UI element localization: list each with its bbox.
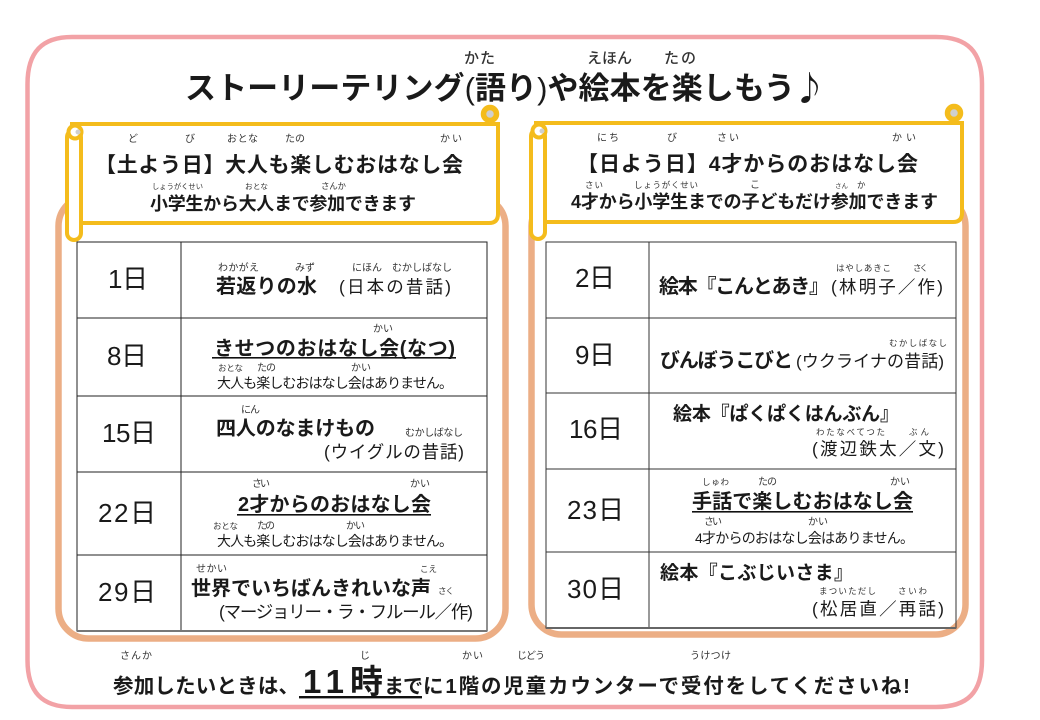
row: 2日 — [575, 263, 943, 298]
sunday banner furigana: しょうがくせい — [634, 180, 698, 190]
book title: 絵本『こぶじいさま』 — [660, 562, 853, 584]
event note: 大人も楽しむおはなし会はありません。 — [217, 375, 453, 391]
saturday table — [77, 242, 487, 631]
book author: (林明子／作) — [831, 277, 943, 297]
event furigana: たの — [758, 476, 777, 488]
panel: sunday — [531, 106, 966, 634]
title text: ストーリーテリング(語り)や絵本を楽しもう — [185, 71, 795, 106]
date: 1日 — [108, 264, 148, 294]
story title: びんぼうこびと — [660, 349, 793, 372]
event furigana: かい — [808, 516, 828, 528]
sunday banner heading: 【日よう日】4才からのおはなし会 — [577, 153, 918, 176]
author furigana — [819, 586, 927, 596]
sunday banner subheading: 4才から小学生までの子どもだけ参加できます — [571, 191, 938, 212]
story furigana — [218, 261, 452, 274]
event note: 大人も楽しむおはなし会はありません。 — [217, 533, 453, 549]
book title: 絵本『こんとあき』 — [659, 275, 829, 298]
book author: (松居直／再話) — [812, 599, 944, 619]
saturday banner heading: 【土よう日】大人も楽しむおはなし会 — [95, 154, 463, 177]
saturday banner furigana: おとな — [227, 133, 258, 145]
author furigana: まついただし — [819, 586, 876, 596]
footer furigana: じ — [360, 650, 370, 662]
sunday banner furigana: こ — [750, 180, 760, 191]
event underline — [212, 357, 456, 359]
footer furigana: じどう — [517, 650, 545, 662]
author furigana: わたなべてつた — [816, 427, 885, 437]
date: 22日 — [98, 498, 156, 528]
saturday banner furigana: さんか — [321, 181, 346, 191]
sunday banner furigana: さい — [585, 180, 603, 190]
footer furigana — [120, 650, 731, 662]
event note: 4才からのおはなし会はありません。 — [695, 530, 914, 546]
sunday scroll banner — [531, 106, 962, 239]
date: 2日 — [575, 263, 615, 293]
saturday banner furigana: たの — [285, 133, 305, 145]
footer furigana: さんか — [120, 650, 152, 662]
date: 9日 — [575, 340, 615, 370]
saturday banner furigana: しょうがくせい — [152, 182, 203, 191]
saturday banner furigana: おとな — [245, 182, 268, 191]
story furigana: こえ — [420, 564, 437, 574]
panel: saturday — [58, 108, 506, 638]
author furigana — [836, 263, 928, 273]
row: 16日 — [569, 403, 944, 459]
event underline — [692, 511, 913, 513]
origin furigana: むかしばなし — [889, 338, 947, 348]
sunday banner text — [571, 132, 938, 212]
story furigana: にほん — [352, 262, 382, 274]
sunday orange frame — [532, 196, 966, 634]
event title: 2才からのおはなし会 — [238, 493, 431, 516]
row: 29日 — [98, 563, 473, 622]
event furigana — [218, 323, 393, 374]
event title: きせつのおはなし会(なつ) — [214, 337, 455, 360]
footer furigana: かい — [462, 650, 483, 662]
story title: 四人のなまけもの — [216, 417, 375, 440]
row: 30日 — [567, 562, 944, 619]
story author: (マージョリー・ラ・フルール／作) — [219, 602, 473, 622]
sunday banner furigana: にち — [597, 132, 619, 144]
title furigana: かた — [464, 50, 495, 67]
event furigana: おとな — [213, 521, 238, 531]
footer text end: に1階の児童カウンターで受付をしてくださいね! — [423, 675, 910, 698]
title — [185, 50, 826, 110]
row: 23日 — [567, 476, 914, 546]
row: 22日 — [98, 478, 453, 549]
story furigana — [241, 404, 463, 439]
footer notice — [113, 650, 910, 700]
row: 1日 — [108, 261, 452, 298]
event furigana: かい — [410, 478, 430, 490]
sunday banner furigana: び — [667, 132, 677, 144]
story title: 世界でいちばんきれいな声 — [191, 577, 431, 600]
story title: 若返りの水 — [216, 275, 317, 298]
event furigana — [213, 478, 430, 532]
event title: 手話で楽しむおはなし会 — [692, 490, 913, 513]
event furigana: たの — [257, 520, 275, 532]
footer text middle: まで — [384, 676, 423, 698]
author furigana: さく — [913, 263, 928, 273]
author furigana: さいわ — [898, 586, 927, 596]
saturday banner furigana — [128, 133, 462, 191]
event furigana: かい — [346, 520, 365, 532]
author furigana — [816, 427, 929, 437]
date: 29日 — [98, 577, 156, 607]
sunday banner furigana: さい — [717, 132, 739, 144]
footer text start: 参加したいときは、 — [113, 675, 299, 698]
sunday banner furigana: か — [857, 180, 866, 190]
event underline — [237, 514, 431, 516]
book author: (渡辺鉄太／文) — [812, 439, 944, 459]
saturday banner furigana: び — [185, 133, 195, 145]
date: 16日 — [569, 414, 623, 444]
event furigana: たの — [257, 362, 276, 374]
event furigana: さい — [252, 478, 270, 490]
story furigana: わかがえ — [218, 261, 259, 274]
sunday table grid — [546, 242, 956, 628]
title furigana — [464, 50, 696, 67]
saturday scroll banner — [67, 108, 498, 240]
date: 8日 — [107, 341, 147, 371]
event furigana: かい — [351, 362, 371, 374]
row: 15日 — [102, 404, 464, 462]
story furigana: むかしばなし — [405, 427, 463, 439]
saturday banner text — [95, 133, 463, 214]
footer underline — [299, 696, 422, 698]
sunday banner furigana — [585, 132, 916, 191]
story furigana: みず — [295, 262, 315, 274]
story furigana: せかい — [196, 563, 227, 575]
event furigana: しゅわ — [702, 477, 729, 487]
row: 9日 — [575, 338, 947, 372]
story furigana: にん — [241, 404, 260, 416]
sunday banner furigana: かい — [892, 132, 916, 144]
event furigana: おとな — [218, 363, 243, 373]
saturday banner furigana: ど — [128, 133, 138, 145]
saturday orange frame — [58, 196, 506, 638]
sunday banner furigana: さん — [835, 182, 848, 190]
event furigana: かい — [373, 323, 393, 335]
saturday table grid — [77, 242, 487, 631]
story furigana: さく — [438, 586, 454, 596]
event furigana: かい — [890, 476, 910, 488]
sunday table — [546, 242, 956, 628]
date: 23日 — [567, 495, 624, 525]
event furigana — [702, 476, 910, 528]
footer emphasized time: 11時 — [303, 663, 383, 700]
title furigana: たの — [664, 50, 696, 67]
footer furigana: うけつけ — [690, 650, 731, 662]
row: 8日 — [107, 323, 456, 391]
story origin: (ウクライナの昔話) — [796, 352, 944, 371]
saturday banner furigana: かい — [440, 133, 462, 145]
story origin: (日本の昔話) — [339, 277, 451, 297]
story furigana: むかしばなし — [392, 262, 452, 274]
title furigana: えほん — [587, 50, 632, 67]
event furigana: さい — [704, 516, 722, 528]
icon: music note: ♪ — [793, 62, 826, 110]
saturday banner subheading: 小学生から大人まで参加できます — [150, 193, 416, 214]
story furigana — [196, 563, 454, 596]
author furigana: ぶん — [909, 427, 929, 437]
author furigana: はやしあきこ — [836, 263, 891, 273]
book title: 絵本『ぱくぱくはんぶん』 — [673, 403, 899, 425]
date: 15日 — [102, 418, 156, 448]
story origin: (ウイグルの昔話) — [324, 442, 464, 462]
date: 30日 — [567, 574, 624, 604]
